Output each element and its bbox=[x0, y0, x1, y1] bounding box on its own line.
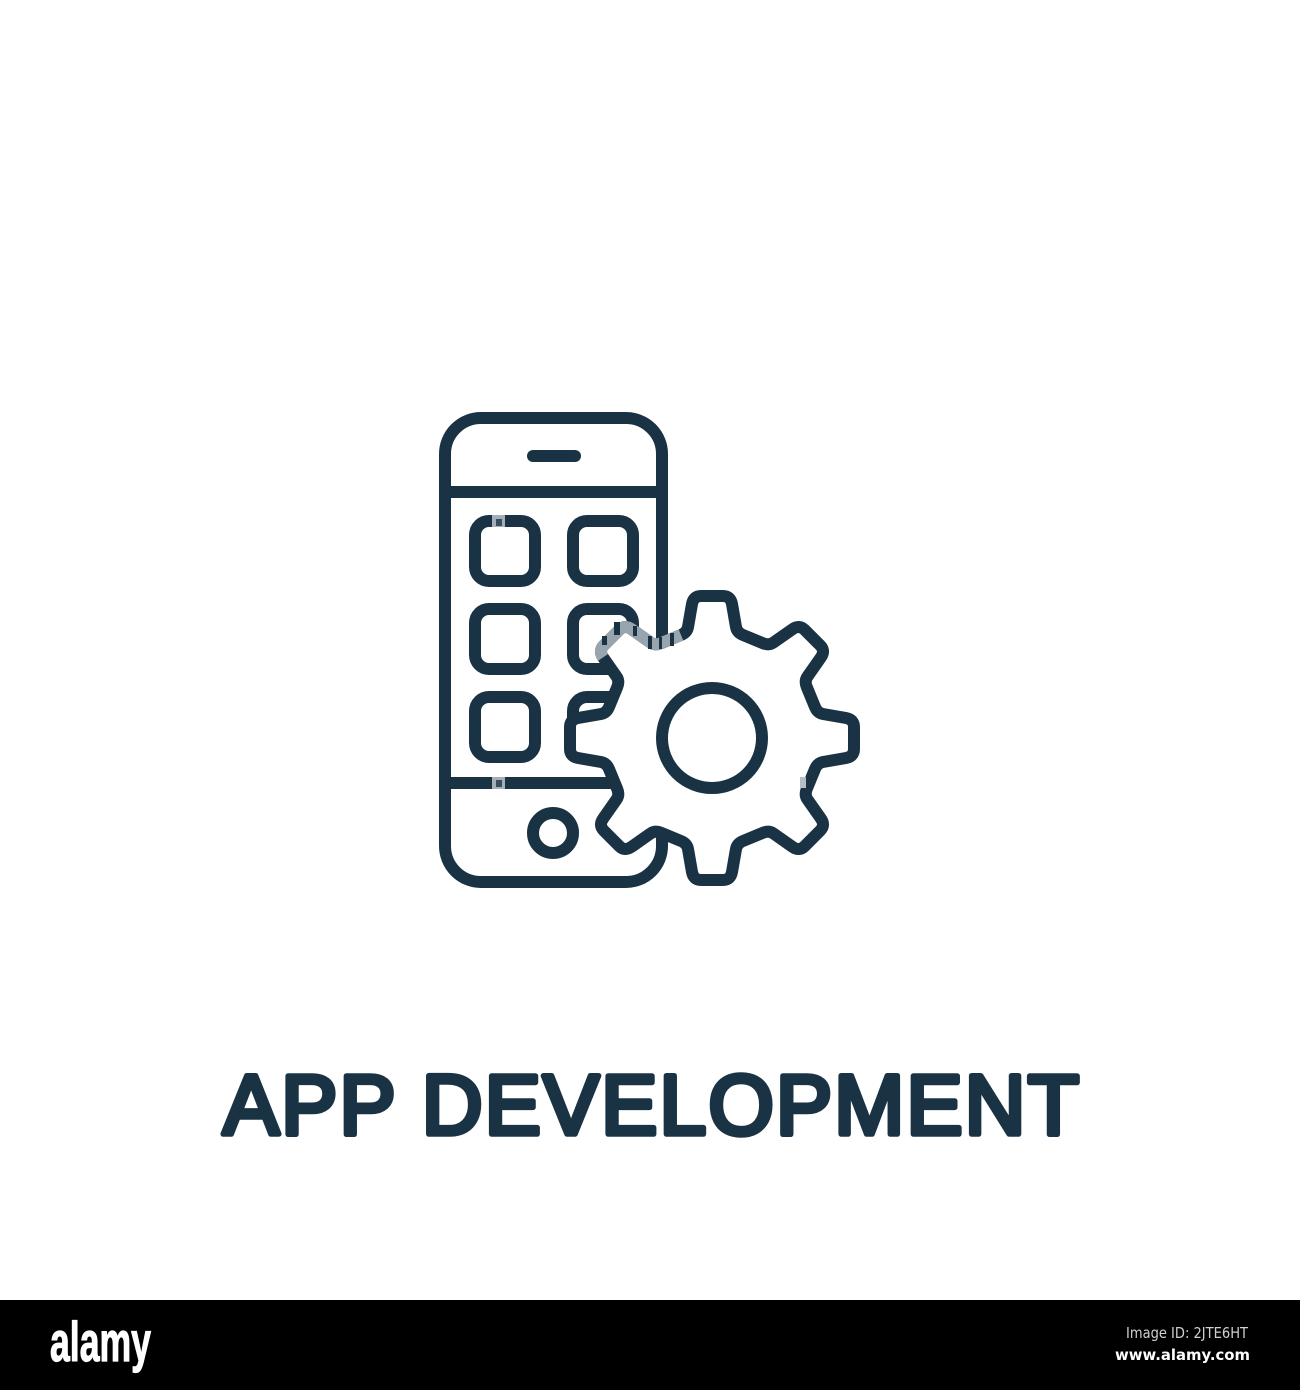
icon: gear bbox=[570, 596, 854, 880]
image id: Image ID: 2JTE6HT bbox=[1126, 1324, 1249, 1342]
icon: smartphone bbox=[445, 418, 662, 882]
footer bar bbox=[0, 1300, 1300, 1390]
logo: alamy: alamy bbox=[50, 1310, 151, 1373]
watermark overlay on gear edge bbox=[492, 515, 806, 789]
title: APP DEVELOPMENT bbox=[223, 1058, 1079, 1152]
website: www.alamy.com bbox=[1115, 1346, 1250, 1364]
icon: app development phone and gear bbox=[445, 418, 854, 882]
